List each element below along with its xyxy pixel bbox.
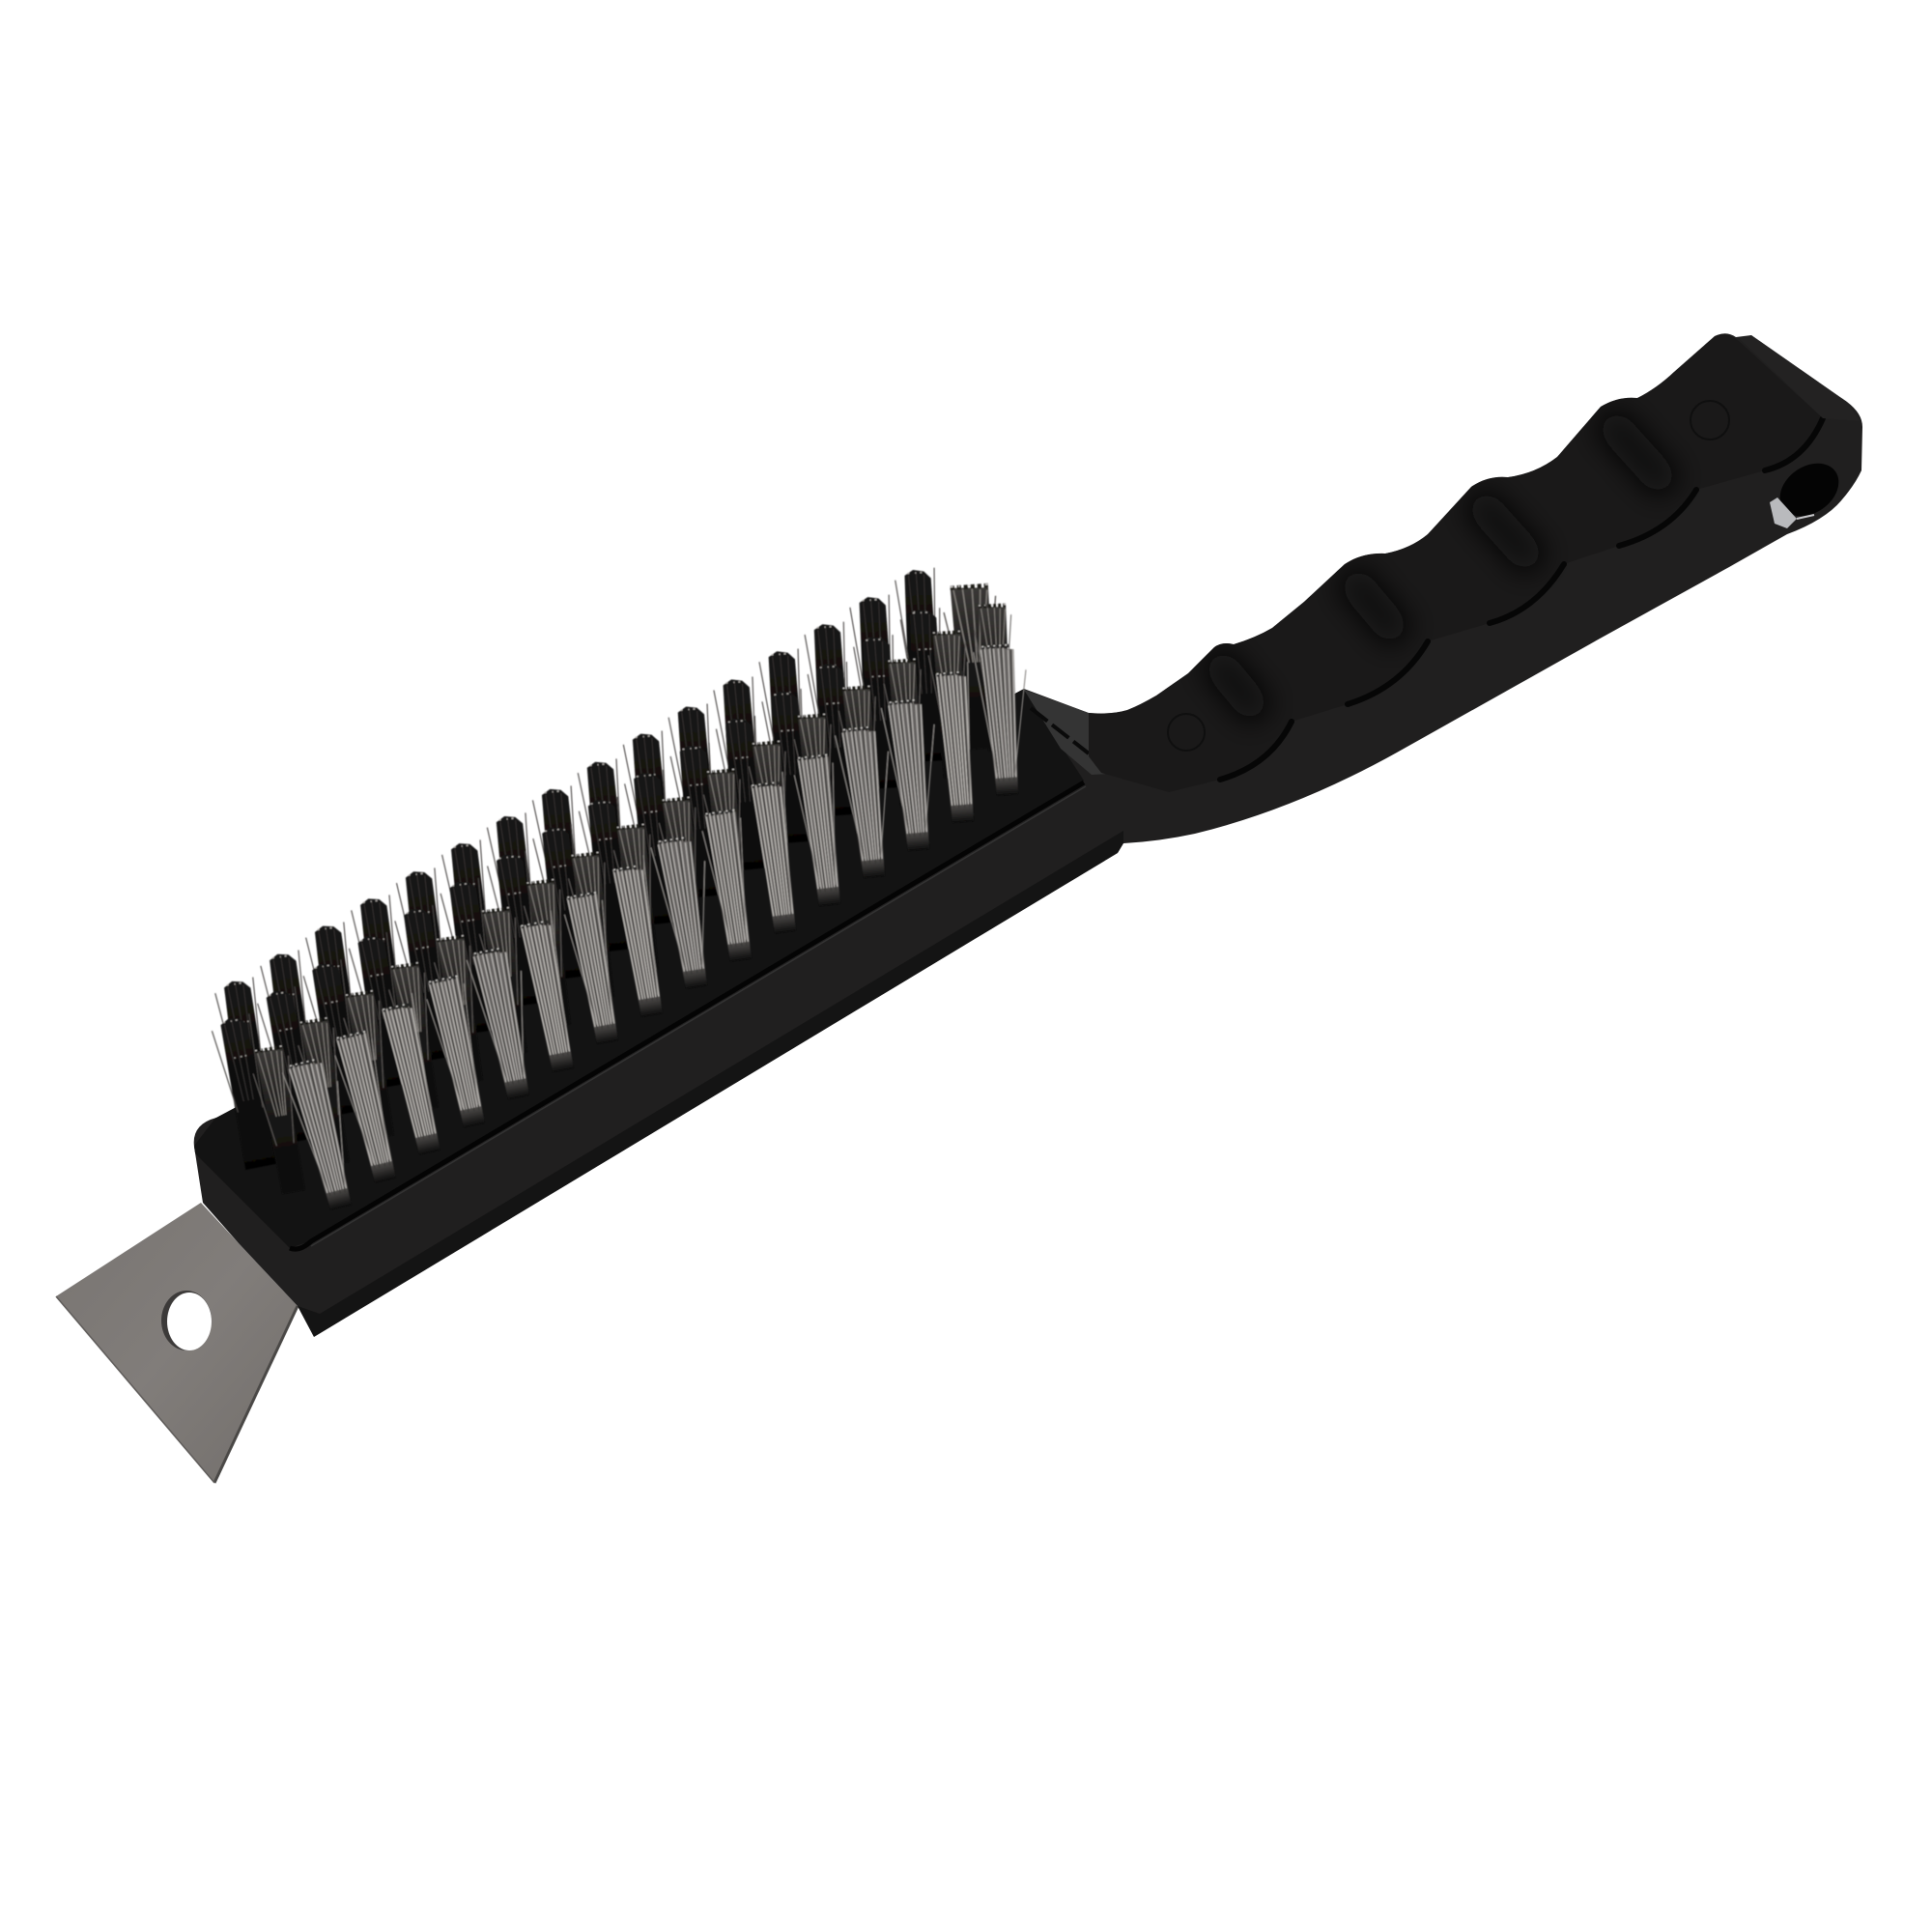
wire bristles	[210, 568, 1035, 1213]
head lower lip	[298, 831, 1123, 1337]
end cap bevel	[1749, 335, 1847, 419]
bristle row 3	[210, 608, 948, 1171]
brush body and handle	[184, 319, 1874, 1343]
brush head top face	[191, 689, 1084, 1248]
bristle row 1 (front, silver)	[281, 643, 1035, 1213]
grip panel with scallops	[1089, 334, 1719, 775]
scraper blade	[56, 1203, 298, 1483]
head ridge line	[290, 782, 1084, 1249]
hanging hole	[1770, 452, 1849, 527]
head ridge highlight	[311, 786, 1086, 1246]
moulded dimples	[1168, 401, 1729, 751]
grip rib shadows	[1212, 417, 1669, 715]
grip groove arcs	[1220, 418, 1823, 780]
neck logo band	[1024, 690, 1105, 775]
product illustration: wire brush with scraper	[56, 333, 1862, 1484]
bristle row 2	[249, 604, 1018, 1195]
bristle row 4 (rear)	[213, 568, 1007, 1143]
plastic tag	[1770, 497, 1814, 528]
